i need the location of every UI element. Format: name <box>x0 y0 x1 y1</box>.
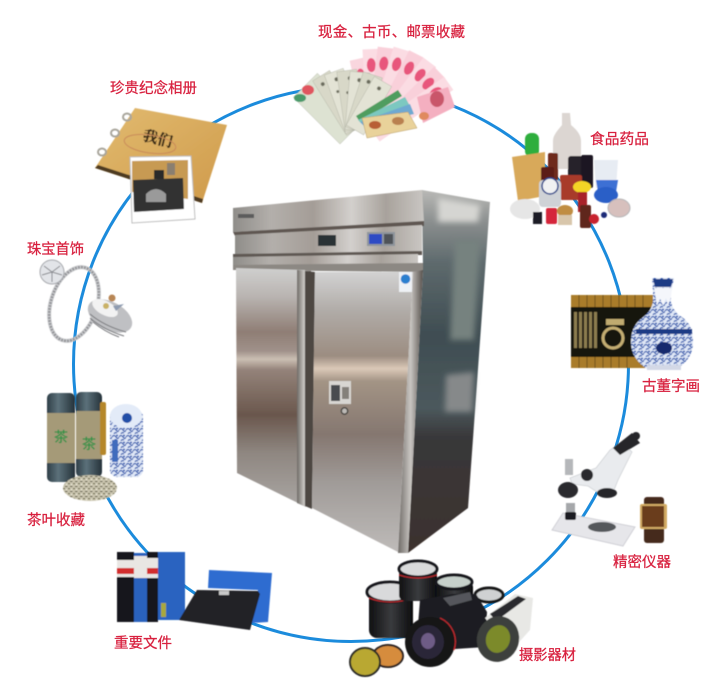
keypad lock <box>329 381 351 404</box>
focus knob <box>558 482 578 498</box>
certification sticker <box>399 272 412 292</box>
label: documents: 重要文件 <box>114 635 172 652</box>
cabinet control panel <box>235 225 422 255</box>
binder black thin <box>147 552 158 622</box>
item: cameras and lenses <box>350 561 533 676</box>
yellow cap bottle <box>573 181 591 228</box>
blue porcelain tin <box>110 404 143 477</box>
item: medicines and food <box>510 113 630 228</box>
left note portraits <box>294 85 314 102</box>
black folder <box>179 590 260 630</box>
temperature display <box>318 235 336 246</box>
item: tea tins <box>47 392 143 501</box>
yellow note <box>362 112 417 138</box>
item: album <box>95 108 227 223</box>
front hundred note <box>417 87 455 123</box>
item: jewellery rings <box>40 260 138 347</box>
small lens <box>475 588 503 602</box>
album title: 我们 <box>141 124 175 152</box>
front wide lens <box>405 617 455 667</box>
left door <box>236 268 305 505</box>
camera body <box>418 594 487 650</box>
coloured filters <box>350 645 403 676</box>
brand plate <box>238 214 254 218</box>
wooden box <box>512 152 545 201</box>
back lens left <box>367 582 413 638</box>
album cover <box>95 108 227 203</box>
folder clasp <box>219 591 229 595</box>
item: microscope and watch <box>552 432 667 546</box>
cabinet top panel <box>233 190 424 232</box>
item: banknotes fan <box>293 47 455 144</box>
microscope column <box>565 459 576 520</box>
album photo <box>130 156 195 223</box>
white telephoto lens <box>471 594 533 667</box>
round tin <box>608 199 630 217</box>
item: binders and folders <box>117 552 272 630</box>
blue plastic cup <box>594 160 618 203</box>
bamboo scroll <box>571 295 653 368</box>
loose tea leaves <box>63 475 117 501</box>
album rings <box>98 114 131 156</box>
eyepieces <box>613 432 640 455</box>
right door <box>312 272 413 552</box>
dark bottles <box>541 153 593 205</box>
small vials <box>533 205 607 225</box>
white medicine jar <box>539 178 561 207</box>
objective <box>597 488 617 498</box>
microscope base <box>552 513 635 546</box>
binder blue <box>134 553 147 622</box>
wrist watch <box>640 497 667 543</box>
cabinet side panel <box>408 190 490 553</box>
label: photography: 摄影器材 <box>519 647 576 664</box>
blue folder <box>208 570 272 623</box>
circular connector line <box>74 86 628 642</box>
green bottle <box>525 133 539 157</box>
diamond <box>40 260 64 284</box>
tablets <box>510 199 540 219</box>
label: album: 珍贵纪念相册 <box>110 79 197 97</box>
grey green banknotes <box>293 68 392 144</box>
tassel <box>100 402 106 455</box>
spine label <box>161 603 166 617</box>
microscope arm <box>570 442 632 494</box>
binder black <box>117 552 134 622</box>
key hole <box>341 408 348 414</box>
label: cash and stamps: 现金、古币、邮票收藏 <box>318 24 466 41</box>
label: antiques: 古董字画 <box>642 378 700 395</box>
blue and white vase <box>631 278 693 370</box>
tea tin one: 茶 <box>54 429 68 445</box>
solitaire ring band <box>40 261 108 347</box>
sample stage <box>588 522 616 532</box>
glass bottle <box>553 113 581 169</box>
label: tea: 茶叶收藏 <box>27 512 85 529</box>
tea tin two: 茶 <box>82 436 96 452</box>
stacked rings <box>82 292 138 340</box>
stainless steel cabinet <box>233 190 490 553</box>
label: jewellery: 珠宝首饰 <box>27 241 84 258</box>
item: scroll and porcelain vase <box>571 278 693 370</box>
touch screen controller <box>367 232 395 246</box>
back lens right <box>436 575 473 600</box>
binder four blue <box>158 552 185 620</box>
label: precision instruments: 精密仪器 <box>613 554 671 571</box>
pink banknotes <box>350 47 453 142</box>
right door edge trim <box>398 270 423 553</box>
label: food and medicine: 食品药品 <box>590 131 649 148</box>
back lens top <box>399 561 437 601</box>
door gap pillars <box>297 270 311 507</box>
green stacked notes <box>356 90 414 126</box>
